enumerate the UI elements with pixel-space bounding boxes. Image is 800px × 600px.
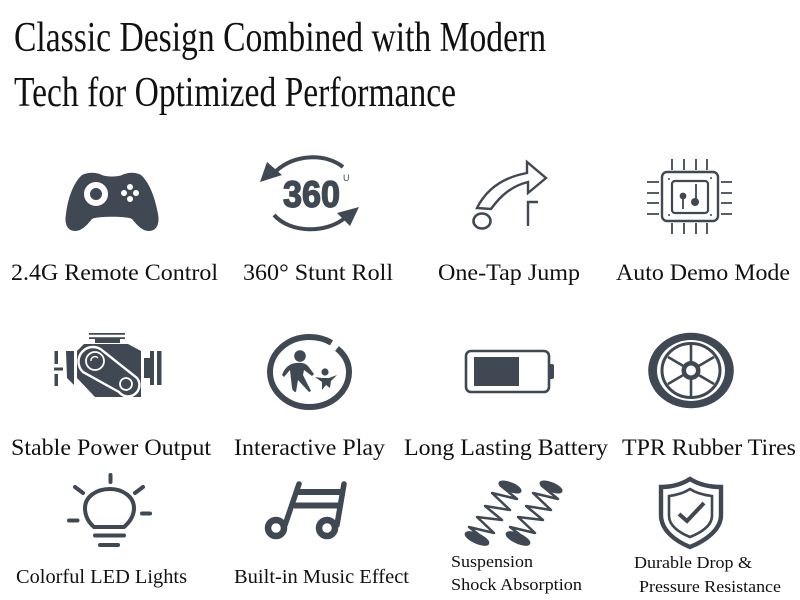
title: Classic Design Combined with Modern [14, 15, 546, 61]
title [14, 15, 546, 116]
icon: chip with sliders [647, 159, 732, 234]
label row 1: One-Tap Jump [438, 260, 580, 285]
label row 2: Stable Power Output [11, 435, 212, 460]
label row 2: Long Lasting Battery [404, 435, 609, 460]
label: durable: Durable Drop & [634, 553, 752, 572]
icon: suspension springs [464, 480, 563, 547]
icon: tire [648, 333, 734, 408]
label row 3: Colorful LED Lights [16, 566, 187, 588]
label: durable [634, 553, 781, 596]
icon: adult and child in ring [267, 334, 349, 407]
label row 1: Auto Demo Mode [616, 260, 790, 285]
label row 2: Interactive Play [234, 435, 386, 460]
label row 1: 360° Stunt Roll [243, 260, 393, 285]
label row 2: TPR Rubber Tires [622, 435, 796, 460]
icon: light bulb [69, 475, 150, 545]
icon: engine [54, 333, 162, 397]
label row 1: 2.4G Remote Control [11, 260, 218, 285]
icon: battery [466, 351, 554, 392]
icon: 360 rotation: U [343, 173, 350, 183]
icon: 360 rotation: 360 [283, 174, 340, 215]
icon: shield with check [661, 479, 721, 547]
title: Tech for Optimized Performance [14, 70, 456, 116]
icon: 360 rotation [260, 157, 359, 229]
label row 3: Built-in Music Effect [234, 566, 409, 588]
icon: jump arrow [474, 162, 546, 228]
label row 1 [11, 260, 790, 285]
label row 2 [11, 435, 796, 460]
icon: music notes [268, 484, 344, 536]
label: suspension: Suspension [451, 552, 534, 571]
label: suspension: Shock Absorption [451, 575, 583, 594]
label row 3 [16, 566, 409, 588]
icon: game controller [65, 173, 159, 231]
label: suspension [451, 552, 583, 594]
label: durable: Pressure Resistance [639, 577, 781, 596]
